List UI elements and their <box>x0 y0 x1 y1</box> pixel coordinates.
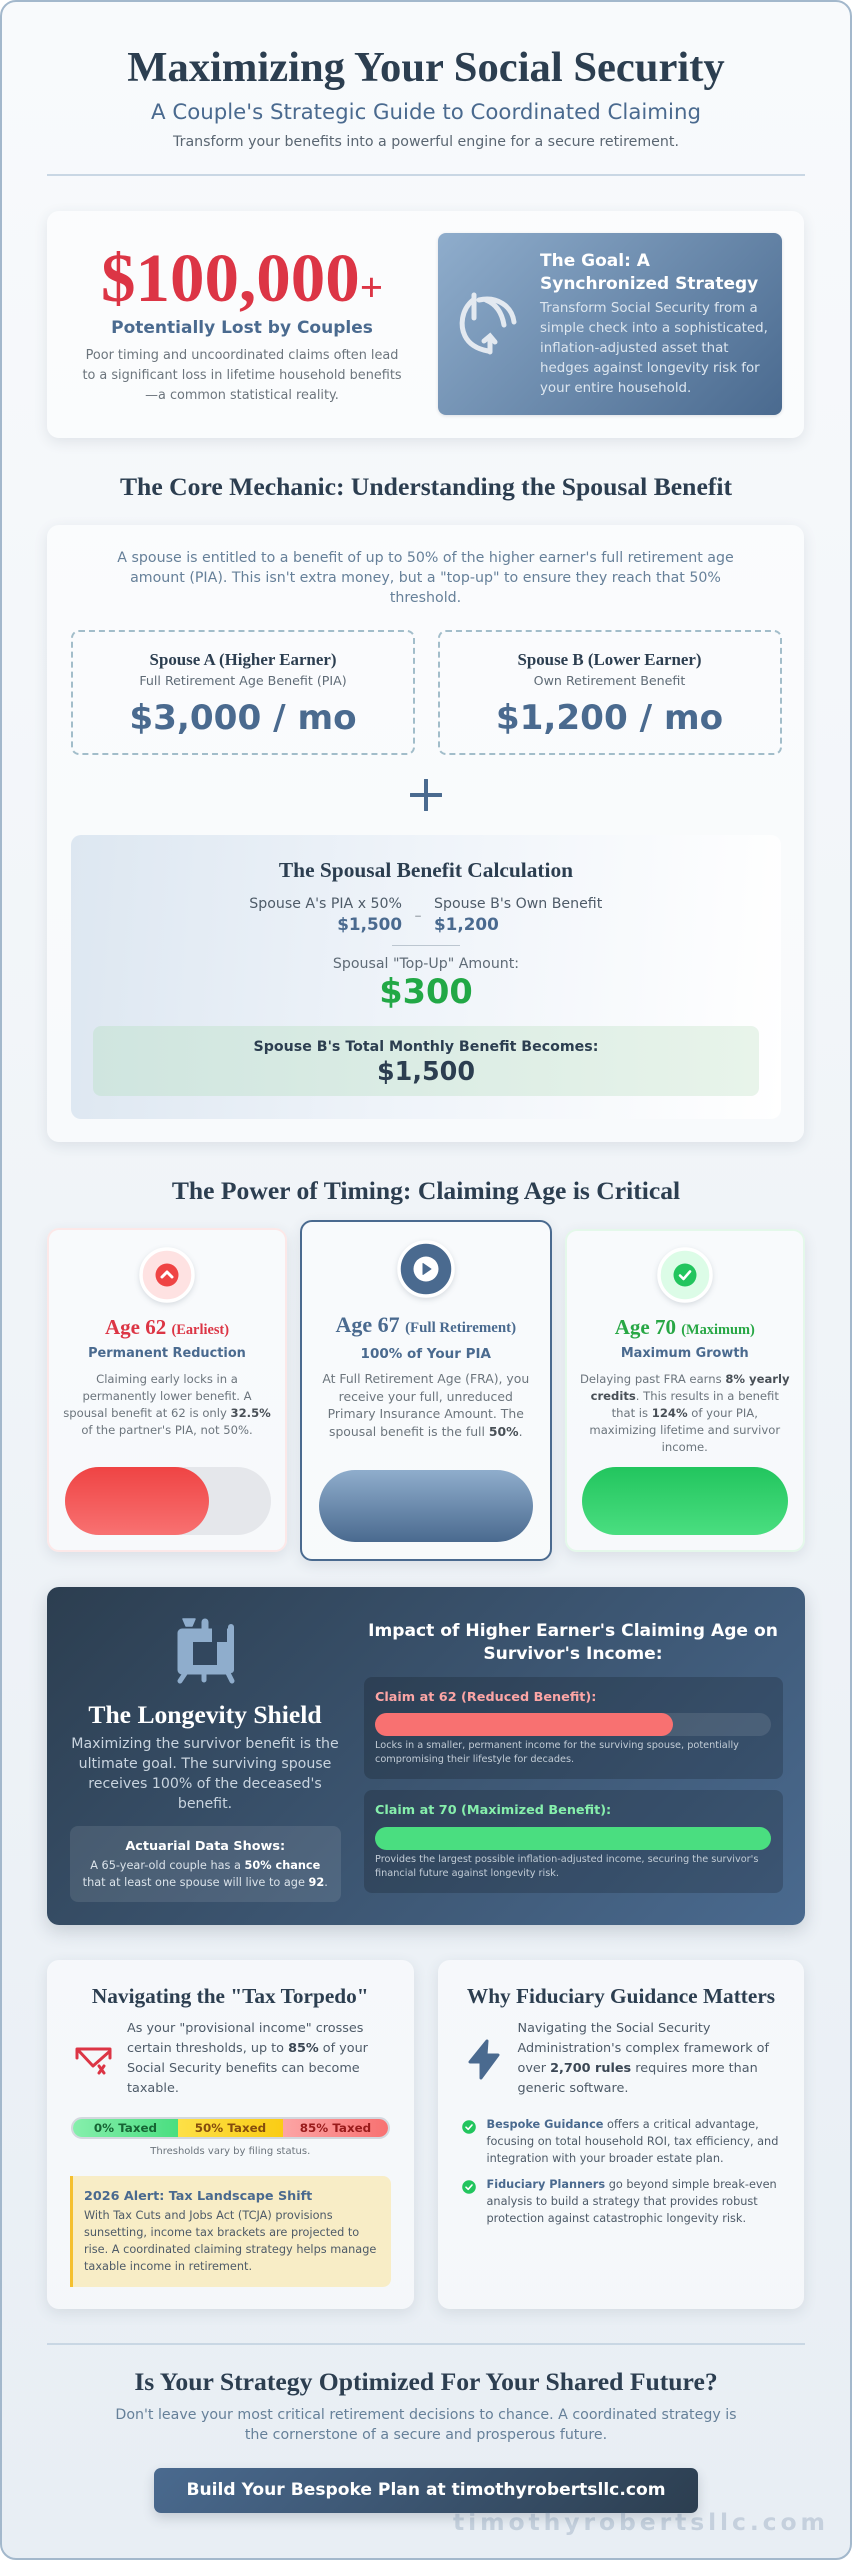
fiduciary description: Administration's complex framework of <box>518 2041 769 2056</box>
spouse A sublabel: Full Retirement Age Benefit (PIA) <box>139 673 347 688</box>
alert text: rise. A coordinated claiming strategy helps manage <box>84 2242 376 2256</box>
heading: core mechanic: The Core Mechanic: Understanding the Spousal Benefit <box>120 472 732 501</box>
list item: fiduciary planners <box>486 2178 777 2224</box>
icon: down chevron badge <box>138 1250 196 1306</box>
intro text <box>117 550 734 606</box>
spouse A box <box>71 630 415 754</box>
gauge: full benefit <box>319 1470 533 1542</box>
bar footnote: Thresholds vary by filing status. <box>150 2146 310 2157</box>
panel: age 62 <box>47 1228 287 1552</box>
longevity description: Maximizing the survivor benefit is the <box>71 1736 339 1752</box>
age subhead: 100% of Your PIA <box>361 1346 491 1362</box>
claim description <box>375 1854 758 1879</box>
goal heading: Synchronized Strategy <box>540 274 758 294</box>
bar: reduced income <box>375 1713 771 1736</box>
panel: goal <box>438 233 782 415</box>
heading: timing: The Power of Timing: Claiming Age is Critical <box>172 1176 680 1205</box>
age description: of the partner's PIA, not 50%. <box>81 1422 253 1436</box>
loss description: to a significant loss in lifetime household benefits <box>82 368 402 383</box>
icon: tax funnel <box>76 2048 112 2075</box>
list item: bespoke guidance: Bespoke Guidance offers a critical advantage, <box>486 2118 759 2130</box>
tax bracket bar <box>71 2117 390 2139</box>
age subhead: Permanent Reduction <box>88 1346 246 1361</box>
gauge: maximum benefit <box>582 1467 788 1535</box>
panel: claim at 62 <box>364 1677 782 1779</box>
age description: credits. This results in a benefit <box>591 1388 779 1402</box>
alert title: 2026 Alert: Tax Landscape Shift <box>84 2189 312 2204</box>
heading: call to action: Is Your Strategy Optimized For Your Shared Future? <box>134 2367 718 2396</box>
panel: longevity shield <box>47 1587 805 1925</box>
age description: Claiming early locks in a <box>96 1372 238 1386</box>
callout text: that at least one spouse will live to age 92. <box>83 1876 328 1888</box>
age subhead: Maximum Growth <box>621 1346 749 1361</box>
icon: check <box>462 2180 476 2194</box>
list item: bespoke guidance <box>486 2118 778 2164</box>
icon: check <box>462 2120 476 2134</box>
total value: $1,500 <box>377 1056 475 1086</box>
operand A <box>249 896 402 934</box>
impact heading <box>368 1621 778 1664</box>
tax description: As your "provisional income" crosses <box>127 2021 363 2036</box>
intro text: amount (PIA). This isn't extra money, but a "top-up" to ensure they reach that 50% <box>130 570 721 586</box>
alert text <box>84 2208 376 2272</box>
calculation heading: The Spousal Benefit Calculation <box>279 858 573 882</box>
fiduciary description <box>518 2021 770 2096</box>
loss heading: Potentially Lost by Couples <box>111 318 373 338</box>
age description: receive your full, unreduced <box>339 1389 513 1404</box>
intro text: A spouse is entitled to a benefit of up to 50% of the higher earner's full retirement age <box>117 550 734 566</box>
age description: spousal benefit is the full 50%. <box>329 1424 523 1439</box>
icon: lightning bolt <box>468 2040 500 2080</box>
loss description: —a common statistical reality. <box>145 388 339 403</box>
button <box>154 2468 698 2513</box>
spouse B label: Spouse B (Lower Earner) <box>517 650 702 669</box>
panel: fiduciary guidance <box>438 1960 804 2309</box>
loss description <box>82 348 402 403</box>
age heading: Age 62 (Earliest) <box>105 1315 229 1339</box>
tax heading: Navigating the "Tax Torpedo" <box>92 1984 369 2008</box>
goal description: hedges against longevity risk for <box>540 361 760 376</box>
callout text: A 65-year-old couple has a 50% chance <box>90 1858 320 1872</box>
spouse A value: $3,000 / mo <box>129 698 357 738</box>
bracket: 85% <box>283 2119 388 2137</box>
panel: hero <box>47 211 804 438</box>
list item: bespoke guidance: focusing on total household ROI, tax efficiency, and <box>486 2134 778 2148</box>
longevity description: receives 100% of the deceased's <box>88 1776 322 1792</box>
call to action text: the cornerstone of a secure and prosperous future. <box>245 2427 607 2443</box>
shield cut-out <box>193 1642 217 1665</box>
claim description: financial future against longevity risk. <box>375 1868 559 1879</box>
list item: fiduciary planners: Fiduciary Planners go beyond simple break-even <box>486 2178 777 2190</box>
age description: Primary Insurance Amount. The <box>328 1406 524 1421</box>
callout text <box>82 1858 328 1888</box>
goal heading <box>540 250 758 294</box>
age description: that is 124% of your PIA, <box>612 1406 758 1420</box>
list item: bespoke guidance: integration with your broader estate plan. <box>486 2152 724 2164</box>
operand B: $1,200 <box>434 914 499 934</box>
panel: claim at 70 <box>364 1790 782 1893</box>
tax description: taxable. <box>127 2081 179 2096</box>
fiduciary heading: Why Fiduciary Guidance Matters <box>467 1984 775 2008</box>
tagline: Transform your benefits into a powerful engine for a secure retirement. <box>173 134 679 150</box>
longevity description <box>71 1736 339 1812</box>
panel: age 67 <box>300 1220 552 1561</box>
call to action text <box>115 2407 737 2443</box>
bracket: 0% <box>73 2119 178 2137</box>
total benefit box <box>93 1026 759 1096</box>
spouse B box <box>438 630 782 754</box>
icon: plus <box>410 779 442 811</box>
goal description <box>540 301 768 396</box>
tax description: certain thresholds, up to 85% of your <box>127 2041 368 2056</box>
bracket: 50% <box>178 2119 283 2137</box>
age heading: Age 67 (Full Retirement) <box>335 1312 516 1337</box>
spouse B value: $1,200 / mo <box>496 698 723 738</box>
bracket: 50%: 50% Taxed <box>195 2121 266 2135</box>
shield notch <box>212 1625 227 1642</box>
claim description: compromising their lifestyle for decades. <box>375 1754 574 1765</box>
tax description <box>127 2021 368 2096</box>
age description: maximizing lifetime and survivor <box>589 1422 780 1436</box>
age description: permanently lower benefit. A <box>82 1388 252 1402</box>
goal description: inflation-adjusted asset that <box>540 341 729 356</box>
age description: Delaying past FRA earns 8% yearly <box>580 1372 790 1386</box>
fiduciary description: generic software. <box>518 2081 628 2096</box>
spouse A label: Spouse A (Higher Earner) <box>150 650 336 669</box>
impact heading: Impact of Higher Earner's Claiming Age on <box>368 1621 778 1641</box>
longevity description: ultimate goal. The surviving spouse <box>79 1756 331 1772</box>
spouse B sublabel: Own Retirement Benefit <box>534 673 685 688</box>
claim label: Claim at 70 (Maximized Benefit): <box>375 1803 611 1818</box>
big loss figure: $100,000+ <box>101 240 383 316</box>
bracket: 85%: 85% Taxed <box>300 2121 371 2135</box>
panel: spousal benefit <box>47 525 804 1142</box>
icon: shield <box>178 1618 234 1684</box>
panel: calculation <box>71 835 781 1119</box>
list item: fiduciary planners: analysis to build a strategy that provides robust <box>486 2194 758 2208</box>
watermark: timothyrobertsllc.com <box>453 2508 829 2536</box>
top-up value: $300 <box>379 972 473 1011</box>
total label: Spouse B's Total Monthly Benefit Becomes: <box>254 1039 598 1055</box>
button: Build Your Bespoke Plan at timothyrobertsllc.com <box>186 2480 666 2500</box>
alert text: taxable income in retirement. <box>84 2260 252 2272</box>
longevity heading: The Longevity Shield <box>88 1700 322 1729</box>
age description <box>580 1372 790 1454</box>
goal description: your entire household. <box>540 381 691 396</box>
panel: age 70 <box>565 1229 804 1552</box>
impact heading: Survivor's Income: <box>483 1644 663 1664</box>
bar: maximized income <box>375 1827 771 1850</box>
longevity description: benefit. <box>178 1796 232 1812</box>
claim description: Locks in a smaller, permanent income for the surviving spouse, potentially <box>375 1740 739 1751</box>
operand A: $1,500 <box>337 914 402 934</box>
claim description: Provides the largest possible inflation-adjusted income, securing the survivor's <box>375 1854 758 1865</box>
icon: check badge <box>656 1250 714 1306</box>
alert callout <box>70 2176 391 2287</box>
claim label: Claim at 62 (Reduced Benefit): <box>375 1690 596 1705</box>
icon: play badge <box>396 1244 456 1302</box>
list item: fiduciary planners: protection against catastrophic longevity risk. <box>486 2212 746 2224</box>
goal description: Transform Social Security from a <box>540 301 758 316</box>
goal heading: The Goal: A <box>540 250 650 270</box>
alert text: sunsetting, income tax brackets are projected to <box>84 2226 359 2238</box>
fiduciary description: over 2,700 rules requires more than <box>518 2061 758 2076</box>
subtitle: A Couple's Strategic Guide to Coordinated Claiming <box>151 100 701 125</box>
intro text: threshold. <box>390 590 461 606</box>
goal description: simple check into a sophisticated, <box>540 321 768 336</box>
age description: spousal benefit at 62 is only 32.5% <box>63 1406 271 1420</box>
operand A: Spouse A's PIA x 50% <box>249 896 402 912</box>
top-up label: Spousal "Top-Up" Amount: <box>333 956 519 972</box>
panel: tax torpedo <box>47 1960 414 2309</box>
loss description: Poor timing and uncoordinated claims often lead <box>86 348 398 363</box>
age heading: Age 70 (Maximum) <box>615 1315 755 1339</box>
operand B: Spouse B's Own Benefit <box>434 896 602 912</box>
icon: synchronized arrows <box>460 292 516 354</box>
operand B <box>434 896 602 934</box>
claim description <box>375 1740 739 1765</box>
gauge: reduced benefit <box>65 1467 271 1535</box>
alert text: With Tax Cuts and Jobs Act (TCJA) provisions <box>84 2208 333 2222</box>
age description: At Full Retirement Age (FRA), you <box>322 1371 529 1386</box>
call to action text: Don't leave your most critical retirement decisions to chance. A coordinated strategy is <box>115 2407 737 2423</box>
age description <box>63 1372 271 1436</box>
minus sign: − <box>414 912 422 922</box>
bracket: 0%: 0% Taxed <box>94 2121 157 2135</box>
title: Maximizing Your Social Security <box>127 44 725 91</box>
actuarial callout <box>70 1826 341 1902</box>
age description <box>322 1371 529 1439</box>
tax description: Social Security benefits can become <box>127 2061 360 2076</box>
callout title: Actuarial Data Shows: <box>125 1839 285 1854</box>
age description: income. <box>662 1440 708 1454</box>
fiduciary description: Navigating the Social Security <box>518 2021 711 2036</box>
